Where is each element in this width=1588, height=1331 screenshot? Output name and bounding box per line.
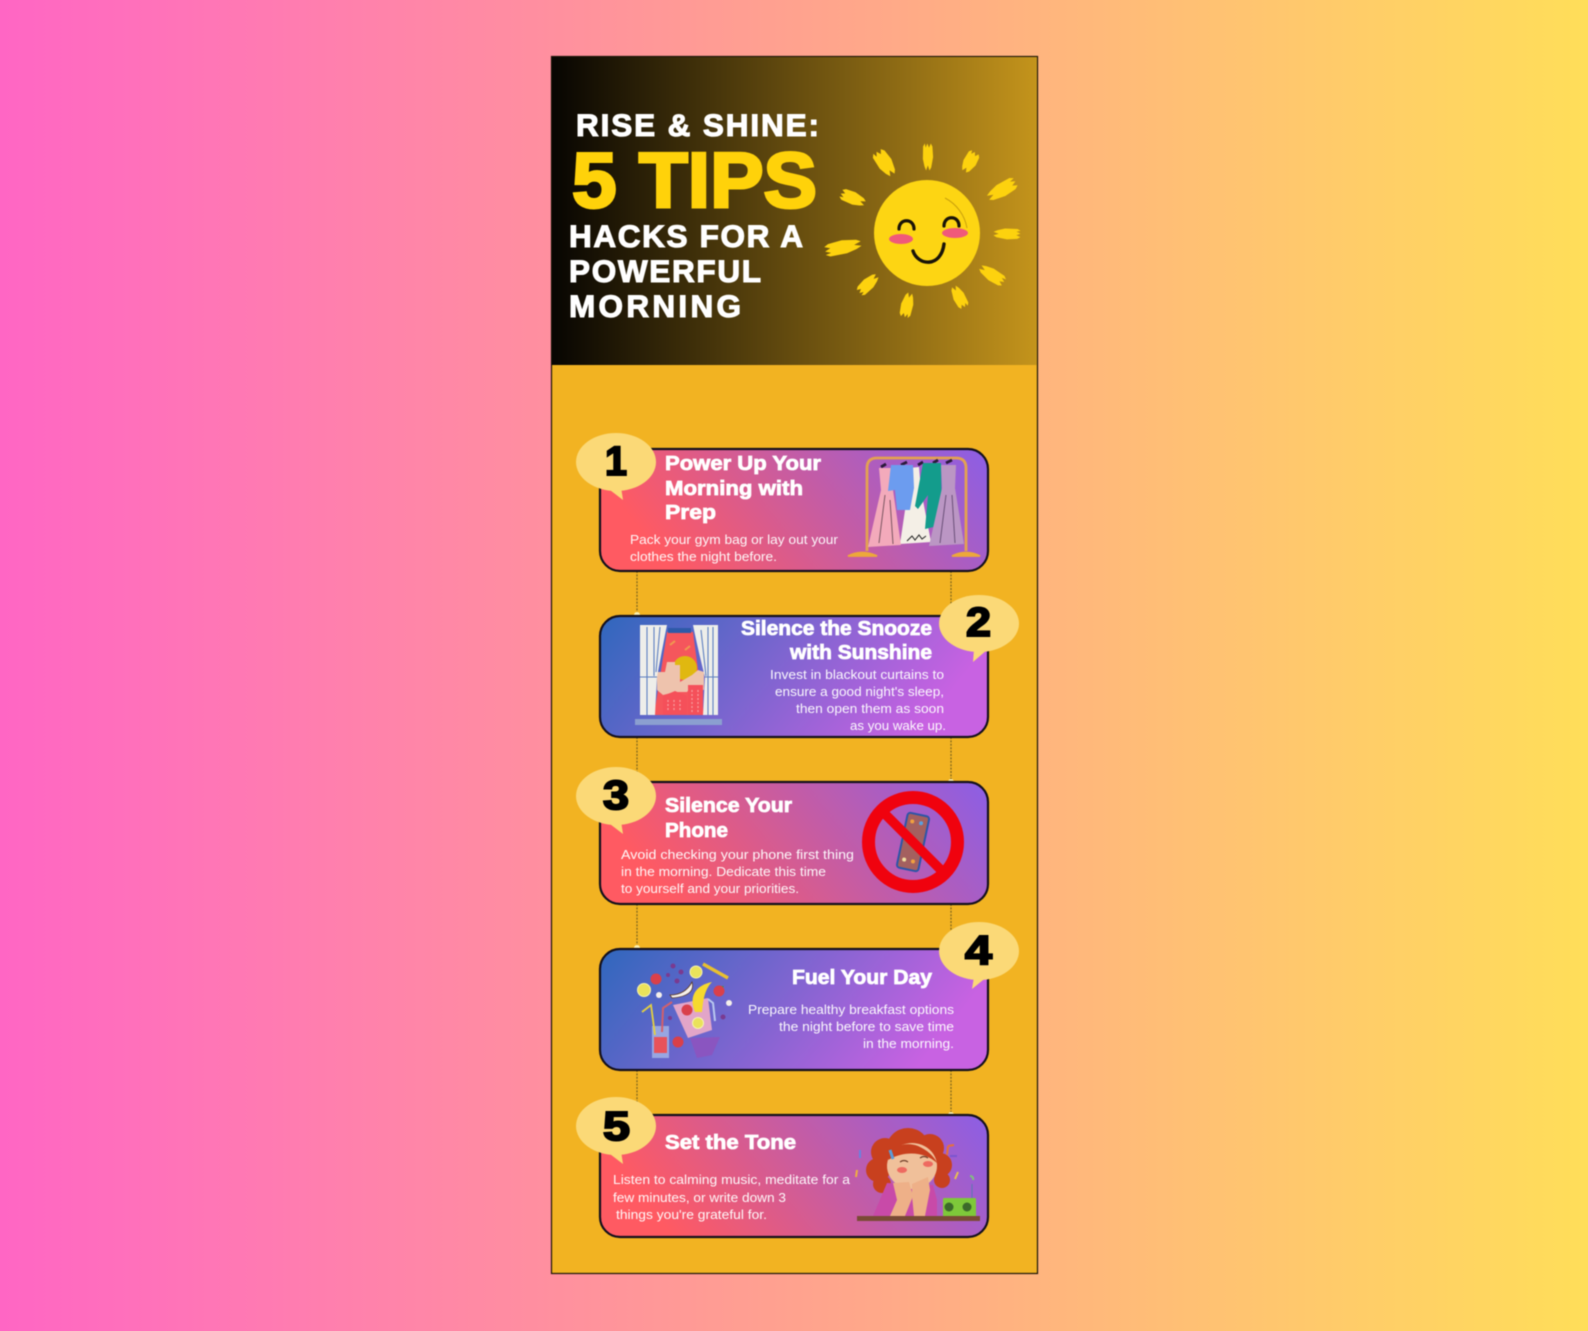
icon: clothes rack: [848, 458, 980, 556]
icon: smoothie and fruit: [638, 964, 732, 1058]
tip 4 body text: Prepare healthy breakfast options: [748, 1002, 954, 1017]
header panel: [552, 57, 1037, 365]
subtitle line 1: HACKS FOR A: [569, 218, 803, 254]
tip 3 heading: [665, 794, 792, 842]
tip 1 body text: Pack your gym bag or lay out your: [630, 532, 839, 547]
tip 2 heading: [741, 617, 932, 664]
tip 2 body text: [770, 667, 946, 733]
subtitle line 3: MORNING: [569, 288, 741, 324]
tip 4 heading: Fuel Your Day: [792, 966, 933, 989]
poster panel: [552, 56, 1038, 1274]
panel: tip 4: [600, 922, 1019, 1070]
tip 5 body text: few minutes, or write down 3: [613, 1190, 786, 1205]
title line: 5 tips: 5 TIPS: [572, 136, 817, 224]
number bubble 5: 5: [603, 1103, 630, 1149]
number bubble 5: [576, 1097, 656, 1164]
tip 3 body text: Avoid checking your phone first thing: [621, 847, 854, 862]
tip 1 body text: clothes the night before.: [630, 549, 777, 564]
tip 2 body text: as you wake up.: [850, 718, 946, 733]
tip 4 body text: in the morning.: [863, 1036, 954, 1051]
number bubble 2: [939, 595, 1019, 662]
icon: window with curtains: [635, 625, 722, 725]
tip 2 heading: with Sunshine: [789, 641, 932, 664]
subtitle line 2: POWERFUL: [569, 253, 761, 289]
number bubble 2: 2: [966, 599, 991, 645]
tip 1 heading: Power Up Your: [665, 452, 821, 475]
tip 4 body text: [748, 1002, 954, 1051]
tip 3 body text: to yourself and your priorities.: [621, 881, 799, 896]
tip 2 body text: Invest in blackout curtains to: [770, 667, 944, 682]
tip 4 body text: the night before to save time: [779, 1019, 954, 1034]
tip 1 heading: Morning with: [665, 477, 803, 500]
number bubble 4: [939, 922, 1019, 989]
tip 1 body text: [630, 532, 839, 564]
icon: girl with radio: [856, 1128, 980, 1221]
tip 3 body text: [621, 847, 854, 896]
tip 5 heading: Set the Tone: [665, 1131, 796, 1154]
tip 3 heading: Phone: [665, 819, 728, 842]
panel: tip 3: [576, 767, 988, 904]
tip 1 heading: Prep: [665, 501, 716, 524]
tip 3 heading: Silence Your: [665, 794, 792, 817]
panel: tip 2: [600, 595, 1019, 737]
icon: no phone sign: [868, 798, 958, 886]
panel: tip 5: [576, 1097, 988, 1237]
tip 2 heading: Silence the Snooze: [741, 617, 932, 640]
number bubble 3: 3: [603, 772, 629, 818]
tip 2 body text: ensure a good night's sleep,: [775, 684, 944, 699]
icon: smiling sun: [824, 143, 1021, 318]
number bubble 1: 1: [605, 438, 627, 484]
tip 5 body text: [613, 1172, 851, 1222]
tip 5 body text: Listen to calming music, meditate for a: [613, 1172, 851, 1187]
connector lines: [634, 571, 954, 1118]
tip 1 heading: [665, 452, 821, 524]
panel: tip 1: [576, 433, 988, 571]
number bubble 1: [576, 433, 656, 500]
number bubble 4: 4: [965, 927, 992, 973]
tip 5 body text: things you're grateful for.: [616, 1207, 767, 1222]
tip 2 body text: then open them as soon: [796, 701, 944, 716]
tip 3 body text: in the morning. Dedicate this time: [621, 864, 826, 879]
number bubble 3: [576, 767, 656, 834]
title line: rise and shine: RISE & SHINE:: [576, 107, 819, 143]
